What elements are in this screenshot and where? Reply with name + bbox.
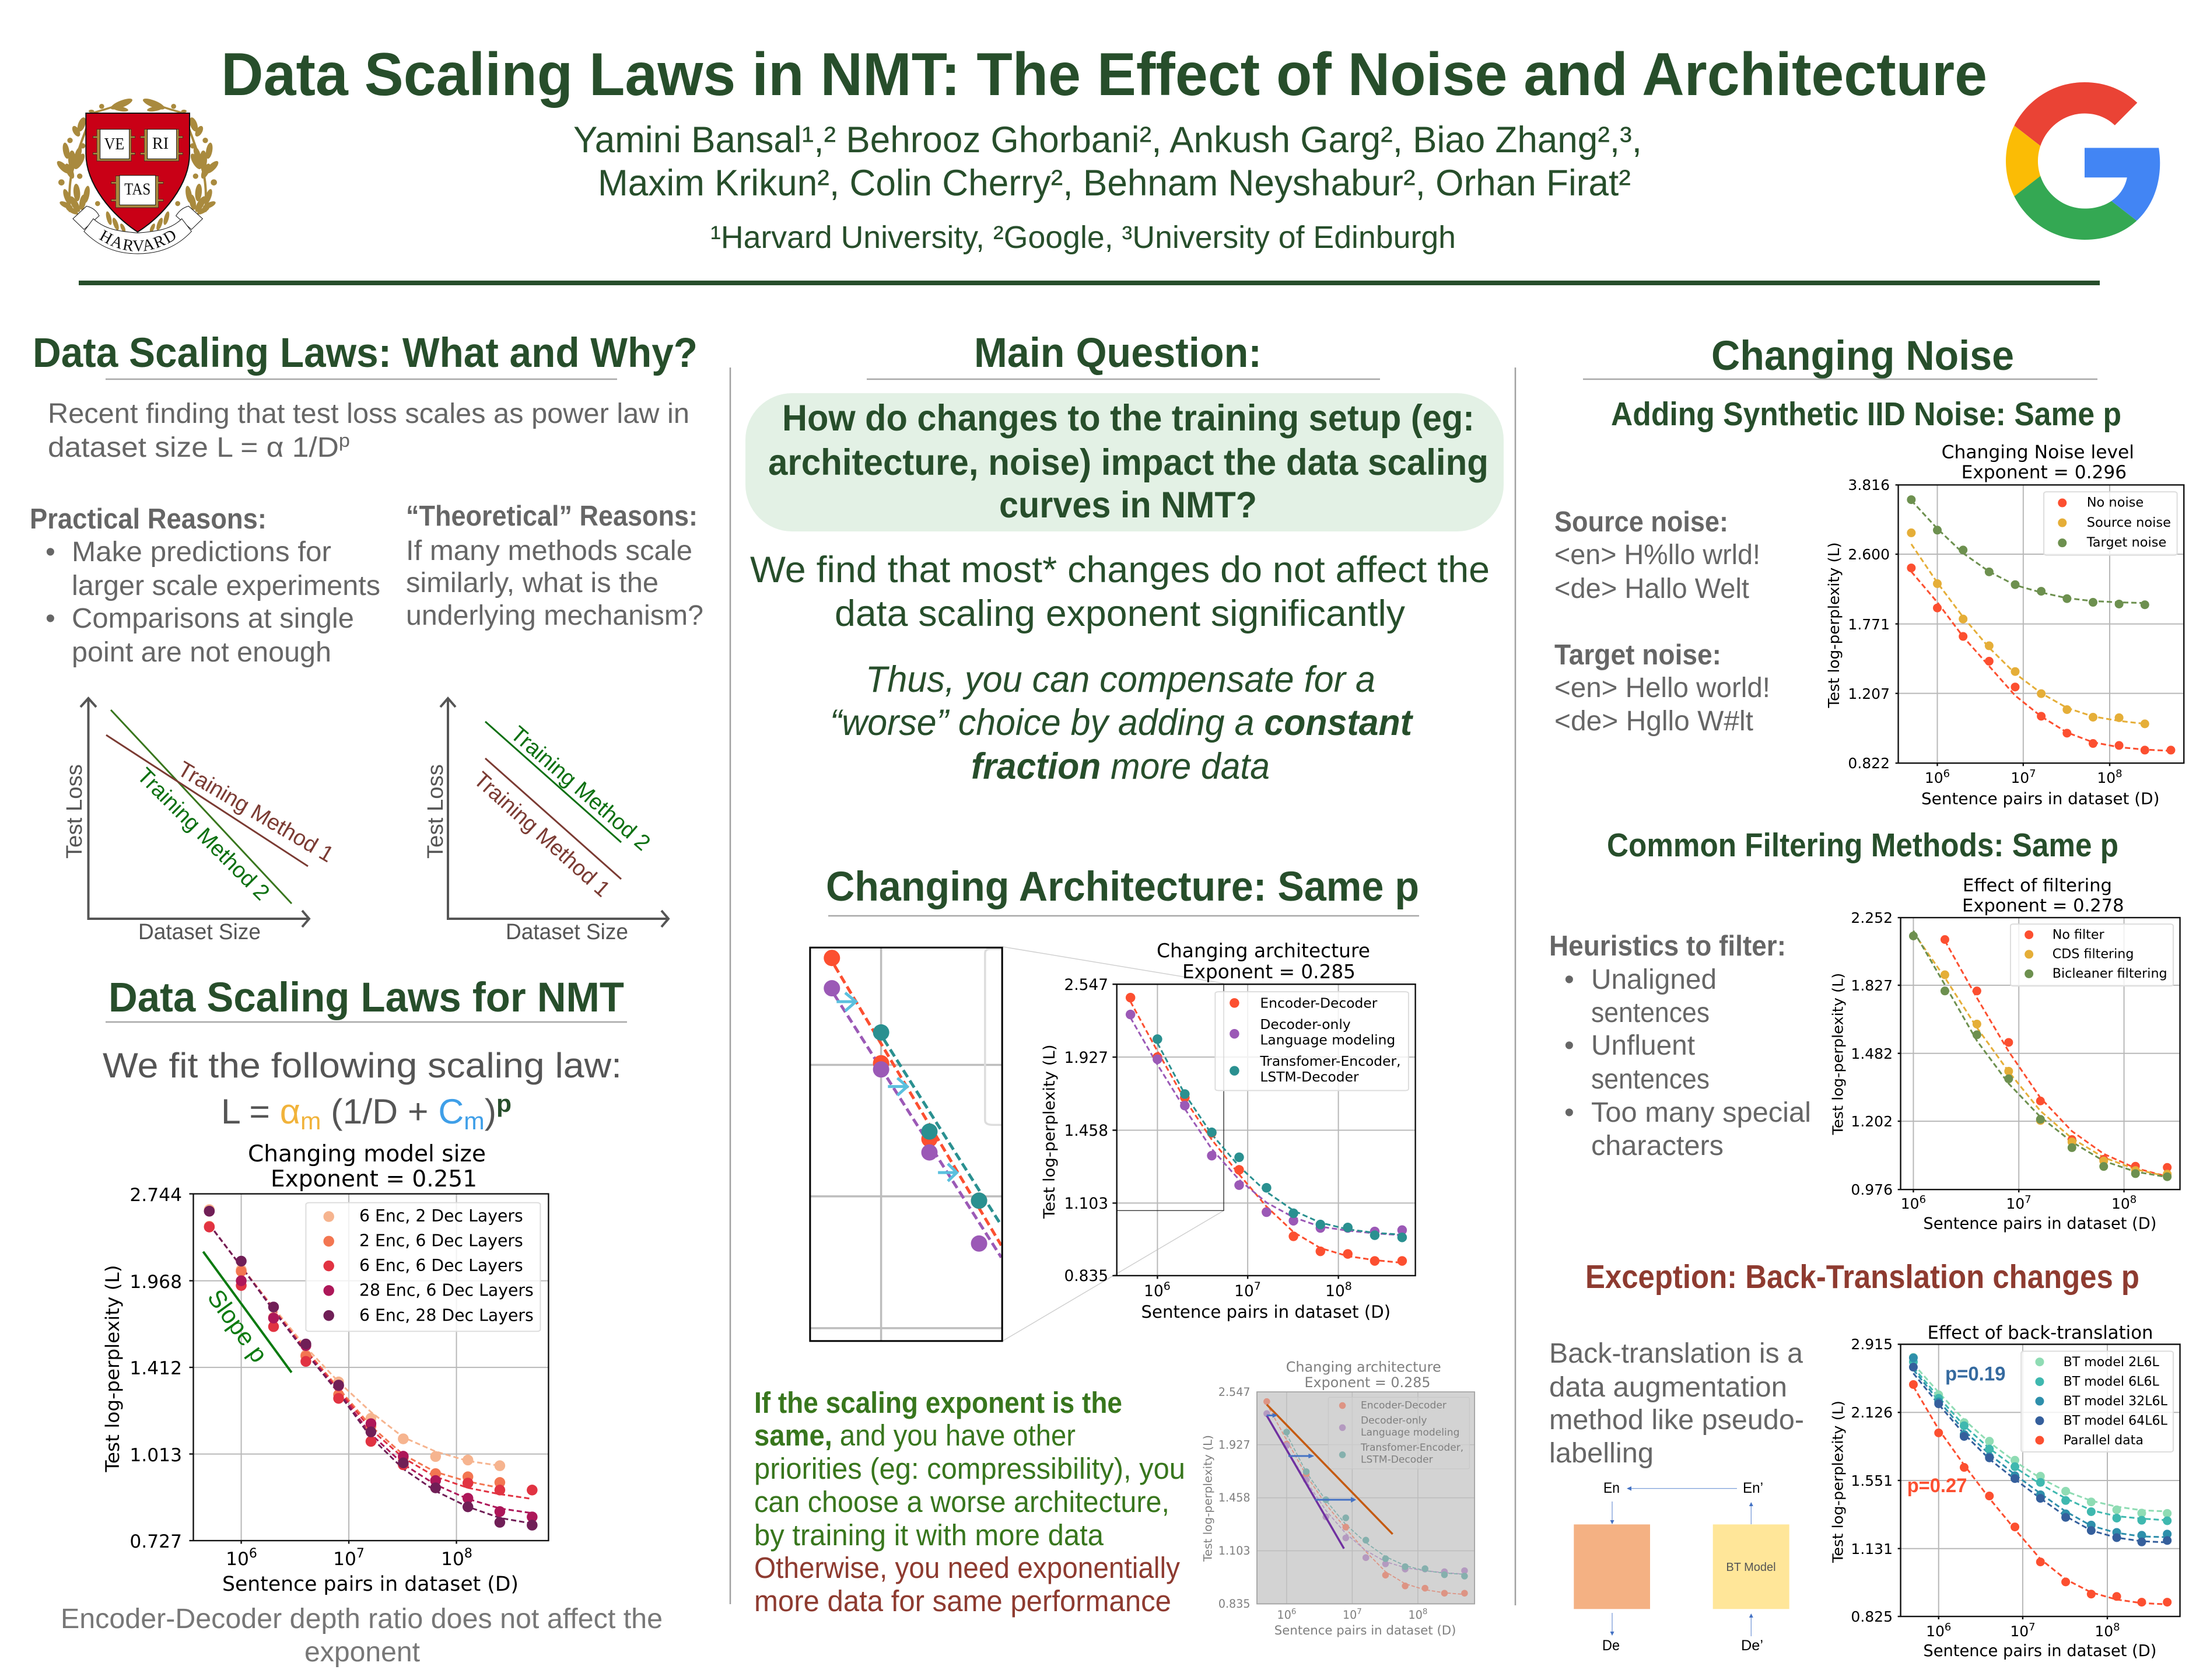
legend: LSTM-Decoder <box>1361 1454 1434 1465</box>
heading: changing architecture: Changing Architecture: Same p <box>826 864 1419 910</box>
legend: No noise <box>2087 495 2144 510</box>
tick and axis labels: 1.927 <box>1218 1438 1251 1451</box>
chart title: Exponent = 0.251 <box>271 1166 477 1192</box>
legend <box>2086 495 2171 550</box>
text: finding: We find that most* changes do not affect the <box>750 550 1490 590</box>
formula: scaling law: m <box>300 1107 321 1135</box>
subheading: exception: Exception: Back-Translation changes p <box>1585 1258 2139 1296</box>
logo: Google G <box>2006 82 2160 240</box>
text: fit intro: We fit the following scaling law: <box>103 1046 622 1085</box>
authors <box>573 120 1642 204</box>
chart title <box>248 1141 486 1192</box>
text: back-translation definition: labelling <box>1549 1438 1654 1469</box>
logo: Harvard shield: VE <box>104 135 124 153</box>
legend: Transfomer-Encoder, <box>1259 1053 1401 1069</box>
plot area <box>1257 1392 1474 1604</box>
plot area <box>1898 918 2180 1192</box>
chart: parallel training curves: Test Loss <box>423 764 448 859</box>
text: compensation: fraction more data <box>971 746 1270 787</box>
diagram: back-translation flow: De’ <box>1741 1637 1763 1654</box>
y tick labels: 1.482 <box>1851 1045 1893 1062</box>
tick and axis labels: 1.103 <box>1218 1544 1251 1558</box>
legend: LSTM-Decoder <box>1260 1069 1359 1085</box>
x tick labels: 8 <box>464 1546 472 1561</box>
chart: parallel training curves <box>423 698 668 944</box>
text: practical reasons: Make predictions for <box>72 537 331 568</box>
y tick labels: 2.744 <box>129 1185 182 1206</box>
text: otherwise takeaway: more data for same performance <box>754 1584 1171 1618</box>
legend: Bicleaner filtering <box>2053 966 2167 981</box>
chart title <box>1962 876 2124 916</box>
chart: faded architecture with slope lines <box>1202 1359 1474 1638</box>
text: power law finding: p <box>339 430 350 451</box>
chart title: Changing architecture <box>1286 1359 1441 1376</box>
text: filter heuristics: • <box>1564 1097 1574 1128</box>
text: target noise example <box>1554 639 1770 737</box>
tick and axis labels: 2.547 <box>1218 1385 1251 1399</box>
x tick labels: 7 <box>2029 768 2036 780</box>
y tick labels: 0.822 <box>1848 755 1890 772</box>
y tick labels: 1.013 <box>129 1445 182 1466</box>
text: same exponent takeaway: can choose a worse architecture, <box>754 1485 1169 1518</box>
text: otherwise takeaway <box>754 1551 1180 1618</box>
y tick labels: 1.827 <box>1851 977 1893 994</box>
text: power law finding: dataset size L = α 1/D <box>48 432 319 463</box>
chart: parallel training curves: Training Method 1 <box>469 767 615 902</box>
text: power law finding: Recent finding that test loss scales as power law in <box>48 398 689 429</box>
callout: main question: How do changes to the training setup (eg: <box>782 398 1474 439</box>
plot area <box>1896 485 2184 766</box>
text: practical reasons: • <box>45 603 55 634</box>
legend: 2 Enc, 6 Dec Layers <box>359 1231 523 1251</box>
subheading: synthetic noise: Adding Synthetic IID Noise: Same p <box>1611 396 2121 433</box>
x tick labels: 10 <box>1144 1282 1164 1300</box>
legend: 28 Enc, 6 Dec Layers <box>359 1281 534 1300</box>
chart title: Exponent = 0.285 <box>1182 961 1356 983</box>
text: filter heuristics: Too many special <box>1591 1097 1811 1128</box>
text: practical reasons: • <box>45 537 55 568</box>
tick and axis labels: 7 <box>1357 1607 1362 1616</box>
x tick labels: 6 <box>1164 1280 1171 1293</box>
tick and axis labels: Sentence pairs in dataset (D) <box>1274 1623 1456 1638</box>
chart: effect of filtering <box>1829 876 2180 1233</box>
annotation: BT exponent: p=0.19 <box>1945 1363 2005 1385</box>
tick and axis labels: 10 <box>1277 1608 1291 1622</box>
chart title <box>1157 940 1370 983</box>
tick and axis labels: 1.458 <box>1218 1491 1251 1504</box>
diagram: back-translation flow: De <box>1602 1637 1620 1654</box>
panel: right column <box>1549 333 2184 1660</box>
formula: scaling law: p <box>496 1090 512 1117</box>
text: back-translation definition: Back-translation is a <box>1549 1338 1803 1369</box>
text: filter heuristics: • <box>1564 1030 1574 1061</box>
x tick labels: 7 <box>2029 1621 2036 1633</box>
y tick labels: 1.927 <box>1064 1049 1108 1067</box>
chart: zoomed inset <box>810 947 1224 1341</box>
text: theoretical reasons: underlying mechanism? <box>406 600 703 631</box>
legend <box>1360 1400 1463 1465</box>
plot area <box>189 1194 548 1544</box>
plot area <box>1112 984 1416 1279</box>
chart title <box>1942 442 2134 483</box>
y tick labels: 1.458 <box>1064 1122 1108 1140</box>
y tick labels: 2.252 <box>1851 909 1893 926</box>
y tick labels: 1.412 <box>129 1358 182 1379</box>
chart title: Effect of filtering <box>1963 876 2112 896</box>
text: same exponent takeaway: priorities (eg: compressibility), you <box>754 1452 1185 1485</box>
text: source noise example <box>1554 506 1760 604</box>
text: theoretical reasons: “Theoretical” Reasons: <box>406 501 698 532</box>
diagram: back-translation flow: BT Model <box>1726 1561 1776 1574</box>
y tick labels <box>1851 909 1893 1198</box>
x tick labels: 10 <box>2006 1195 2025 1212</box>
chart: crossing training curves: Training Method 1 <box>173 757 338 867</box>
heading: scaling laws for NMT: Data Scaling Laws for NMT <box>108 975 624 1021</box>
legend: 6 Enc, 6 Dec Layers <box>359 1256 523 1275</box>
chart title: Changing Noise level <box>1942 442 2134 463</box>
text: otherwise takeaway: Otherwise, you need exponentially <box>754 1551 1180 1584</box>
x tick labels: 6 <box>249 1546 257 1561</box>
legend: BT model 2L6L <box>2064 1354 2160 1370</box>
text: filter heuristics: characters <box>1591 1130 1724 1161</box>
chart: crossing training curves: Training Method 2 <box>132 764 274 905</box>
legend <box>2064 1354 2168 1448</box>
y tick labels: 2.600 <box>1848 546 1890 563</box>
x tick labels: 8 <box>2130 1194 2137 1206</box>
y tick labels: 2.126 <box>1851 1404 1893 1421</box>
y tick labels: 0.976 <box>1851 1181 1893 1198</box>
text: practical reasons: larger scale experiments <box>72 570 380 601</box>
chart: changing noise level <box>1826 442 2184 808</box>
callout: main question: curves in NMT? <box>999 485 1257 526</box>
subheading: filtering: Common Filtering Methods: Same p <box>1607 827 2118 864</box>
logo: Harvard shield <box>57 99 218 254</box>
y tick labels <box>1848 477 1890 772</box>
text: theoretical reasons: If many methods scale <box>406 536 692 566</box>
x tick labels: 6 <box>1945 1621 1951 1633</box>
y tick labels: 1.207 <box>1848 685 1890 702</box>
text: same exponent takeaway: by training it with more data <box>754 1518 1104 1552</box>
legend: BT model 32L6L <box>2064 1394 2168 1409</box>
tick and axis labels: 8 <box>1423 1607 1427 1616</box>
y tick labels: 2.547 <box>1064 976 1108 994</box>
tick and axis labels: 6 <box>1291 1607 1296 1616</box>
x tick labels: 10 <box>2097 769 2116 786</box>
tick and axis labels: Test log-perplexity (L) <box>1202 1435 1215 1562</box>
legend: No filter <box>2053 927 2105 942</box>
x tick labels <box>226 1546 472 1570</box>
x tick labels: 10 <box>2111 1195 2130 1212</box>
legend <box>359 1206 534 1325</box>
diagram: back-translation flow <box>1574 1480 1789 1654</box>
y axis label: Test log-perplexity (L) <box>1041 1044 1059 1219</box>
text: target noise example: <de> Hgllo W#lt <box>1554 706 1753 737</box>
text: same exponent takeaway: same, and you have other <box>754 1419 1076 1452</box>
authors: Maxim Krikun², Colin Cherry², Behnam Neyshabur², Orhan Firat² <box>598 163 1631 204</box>
x tick labels: 10 <box>1925 769 1943 786</box>
authors: Yamini Bansal¹,² Behrooz Ghorbani², Ankush Garg², Biao Zhang²,³, <box>573 120 1642 160</box>
text: source noise example: <de> Hallo Welt <box>1554 573 1749 604</box>
legend: Transfomer-Encoder, <box>1360 1442 1463 1454</box>
x tick labels: 7 <box>356 1546 365 1561</box>
text: target noise example: <en> Hello world! <box>1554 673 1770 704</box>
x tick labels: 10 <box>1234 1282 1254 1300</box>
x axis label: Sentence pairs in dataset (D) <box>1141 1302 1391 1322</box>
chart: changing architecture <box>1041 940 1416 1322</box>
text: depth ratio takeaway: Encoder-Decoder depth ratio does not affect the <box>61 1604 663 1634</box>
tick and axis labels: 10 <box>1409 1608 1423 1622</box>
y tick labels: 1.771 <box>1848 616 1890 633</box>
text: back-translation definition: method like pseudo- <box>1549 1405 1804 1436</box>
text: filter heuristics <box>1549 930 1811 1161</box>
x tick labels <box>1144 1280 1352 1300</box>
x tick labels: 10 <box>1901 1195 1920 1212</box>
chart title: Exponent = 0.296 <box>1962 462 2127 483</box>
legend <box>1259 995 1401 1085</box>
chart: crossing training curves: Dataset Size <box>138 920 261 944</box>
x tick labels: 7 <box>2025 1194 2032 1206</box>
legend: Decoder-only <box>1361 1415 1427 1427</box>
text: compensation <box>830 659 1414 787</box>
text: filter heuristics: Unfluent <box>1591 1030 1695 1061</box>
text: theoretical reasons: similarly, what is the <box>406 568 659 598</box>
y tick labels: 0.825 <box>1851 1608 1893 1625</box>
chart: parallel training curves: Dataset Size <box>506 920 628 944</box>
text: compensation: “worse” choice by adding a constant <box>830 702 1414 743</box>
text: power law finding <box>48 398 689 463</box>
x tick labels: 8 <box>2113 1621 2120 1633</box>
y axis label: Test log-perplexity (L) <box>1829 973 1847 1135</box>
text: source noise example: Source noise: <box>1554 506 1728 538</box>
legend: Language modeling <box>1260 1032 1395 1048</box>
text: filter heuristics: sentences <box>1591 1064 1710 1095</box>
logo: Harvard shield: TAS <box>124 180 150 198</box>
text: practical reasons: Comparisons at single <box>72 603 354 634</box>
y axis label: Test log-perplexity (L) <box>101 1265 124 1473</box>
text: practical reasons: Practical Reasons: <box>30 503 267 535</box>
legend: Encoder-Decoder <box>1361 1400 1447 1412</box>
y tick labels: 0.835 <box>1064 1267 1108 1285</box>
heading: changing noise: Changing Noise <box>1711 333 2014 379</box>
legend: Parallel data <box>2064 1433 2144 1448</box>
x axis label: Sentence pairs in dataset (D) <box>222 1573 519 1596</box>
y tick labels: 1.202 <box>1851 1113 1893 1130</box>
legend: Source noise <box>2087 515 2171 530</box>
y axis label: Test log-perplexity (L) <box>1829 1401 1847 1563</box>
x tick labels: 8 <box>1345 1280 1352 1293</box>
affiliations: ¹Harvard University, ²Google, ³University of Edinburgh <box>710 220 1456 255</box>
x axis label: Sentence pairs in dataset (D) <box>1923 1642 2156 1660</box>
chart: parallel training curves: Training Method 2 <box>506 722 655 856</box>
y tick labels: 1.103 <box>1064 1195 1108 1213</box>
x tick labels: 10 <box>2095 1623 2113 1640</box>
legend: Decoder-only <box>1260 1016 1351 1032</box>
heading: main question: Main Question: <box>974 330 1262 376</box>
tick and axis labels: 0.835 <box>1218 1597 1251 1611</box>
formula: scaling law: C <box>438 1092 485 1135</box>
text: same exponent takeaway <box>754 1386 1185 1552</box>
chart title <box>1286 1359 1441 1391</box>
chart: changing model size <box>101 1141 548 1596</box>
text: filter heuristics: Unaligned <box>1591 964 1717 995</box>
text: source noise example: <en> H%llo wrld! <box>1554 540 1760 570</box>
logo: Harvard shield: HARVARD <box>99 230 175 251</box>
y tick labels: 1.968 <box>129 1272 182 1293</box>
chart: effect of back-translation <box>1829 1322 2180 1660</box>
legend: Encoder-Decoder <box>1260 995 1378 1012</box>
x tick labels: 10 <box>2011 769 2029 786</box>
legend: 6 Enc, 28 Dec Layers <box>359 1306 534 1325</box>
x tick labels: 10 <box>441 1549 464 1570</box>
y tick labels: 1.131 <box>1851 1541 1893 1558</box>
chart title: Changing model size <box>248 1141 486 1167</box>
plot area <box>1898 1344 2180 1619</box>
y tick labels: 3.816 <box>1848 477 1890 494</box>
text: filter heuristics: Heuristics to filter: <box>1549 930 1786 962</box>
chart title: Exponent = 0.278 <box>1962 896 2124 916</box>
text: depth ratio takeaway: exponent <box>304 1637 420 1668</box>
tick and axis labels: 10 <box>1343 1608 1357 1622</box>
x tick labels <box>1926 1621 2120 1640</box>
heading: what and why: Data Scaling Laws: What and Why? <box>33 330 698 376</box>
formula: scaling law: (1/D + <box>321 1092 438 1131</box>
legend: CDS filtering <box>2053 946 2134 961</box>
diagram: back-translation flow: En’ <box>1743 1480 1763 1496</box>
chart: crossing training curves: Test Loss <box>62 764 87 859</box>
y tick labels: 2.915 <box>1851 1336 1893 1353</box>
x tick labels: 10 <box>226 1549 249 1570</box>
x tick labels: 6 <box>1920 1194 1926 1206</box>
text: back-translation definition: data augmentation <box>1549 1372 1787 1403</box>
title: Data Scaling Laws in NMT: The Effect of Noise and Architecture <box>221 41 1987 108</box>
chart title: Effect of back-translation <box>1927 1322 2153 1343</box>
chart title: Exponent = 0.285 <box>1304 1374 1430 1391</box>
panel: left column <box>30 330 703 1668</box>
x tick labels: 10 <box>1325 1282 1345 1300</box>
legend: BT model 6L6L <box>2064 1374 2160 1390</box>
legend: Target noise <box>2086 535 2166 550</box>
formula: scaling law: L = α <box>221 1092 300 1131</box>
formula: scaling law: m <box>464 1107 485 1135</box>
text: filter heuristics: sentences <box>1591 998 1710 1028</box>
text: filter heuristics: • <box>1564 964 1574 995</box>
text: theoretical reasons <box>406 501 703 631</box>
x tick labels: 10 <box>1926 1623 1945 1640</box>
text: depth ratio takeaway <box>61 1604 663 1668</box>
x axis label: Sentence pairs in dataset (D) <box>1923 1215 2156 1233</box>
legend: Language modeling <box>1361 1427 1459 1438</box>
x axis label: Sentence pairs in dataset (D) <box>1921 789 2159 808</box>
callout: main question <box>745 393 1504 531</box>
panel: middle column <box>745 330 1504 1638</box>
x tick labels: 8 <box>2116 768 2123 780</box>
y tick labels: 0.727 <box>129 1531 182 1552</box>
y tick labels <box>1851 1336 1893 1625</box>
text: target noise example: Target noise: <box>1554 639 1721 671</box>
x tick labels: 7 <box>1254 1280 1261 1293</box>
chart title: Changing architecture <box>1157 940 1370 962</box>
annotation: slope p: Slope p <box>202 1284 273 1367</box>
text: finding <box>750 550 1490 634</box>
text: practical reasons: point are not enough <box>72 637 331 668</box>
callout: main question: architecture, noise) impact the data scaling <box>768 442 1488 483</box>
text: practical reasons <box>30 503 380 668</box>
y axis label: Test log-perplexity (L) <box>1826 542 1843 709</box>
diagram: back-translation flow: En <box>1603 1480 1620 1496</box>
text: finding: data scaling exponent significantly <box>835 593 1406 634</box>
y tick labels <box>129 1185 182 1552</box>
legend: BT model 64L6L <box>2064 1413 2168 1428</box>
text: back-translation definition <box>1549 1338 1804 1469</box>
y tick labels <box>1064 976 1108 1285</box>
y tick labels: 1.551 <box>1851 1472 1893 1489</box>
tick and axis labels <box>1202 1385 1456 1638</box>
x tick labels: 10 <box>333 1549 356 1570</box>
x tick labels <box>1925 768 2123 786</box>
legend: 6 Enc, 2 Dec Layers <box>359 1206 523 1226</box>
text: same exponent takeaway: If the scaling exponent is the <box>754 1386 1122 1419</box>
formula: scaling law: ) <box>485 1092 496 1131</box>
text: compensation: Thus, you can compensate for a <box>866 659 1375 700</box>
x tick labels: 6 <box>1943 768 1950 780</box>
annotation: parallel exponent: p=0.27 <box>1907 1475 1967 1497</box>
chart: crossing training curves <box>62 698 338 944</box>
x tick labels <box>1901 1194 2137 1212</box>
logo: Harvard shield: RI <box>152 135 169 153</box>
x tick labels: 10 <box>2010 1623 2029 1640</box>
legend <box>2053 927 2167 981</box>
